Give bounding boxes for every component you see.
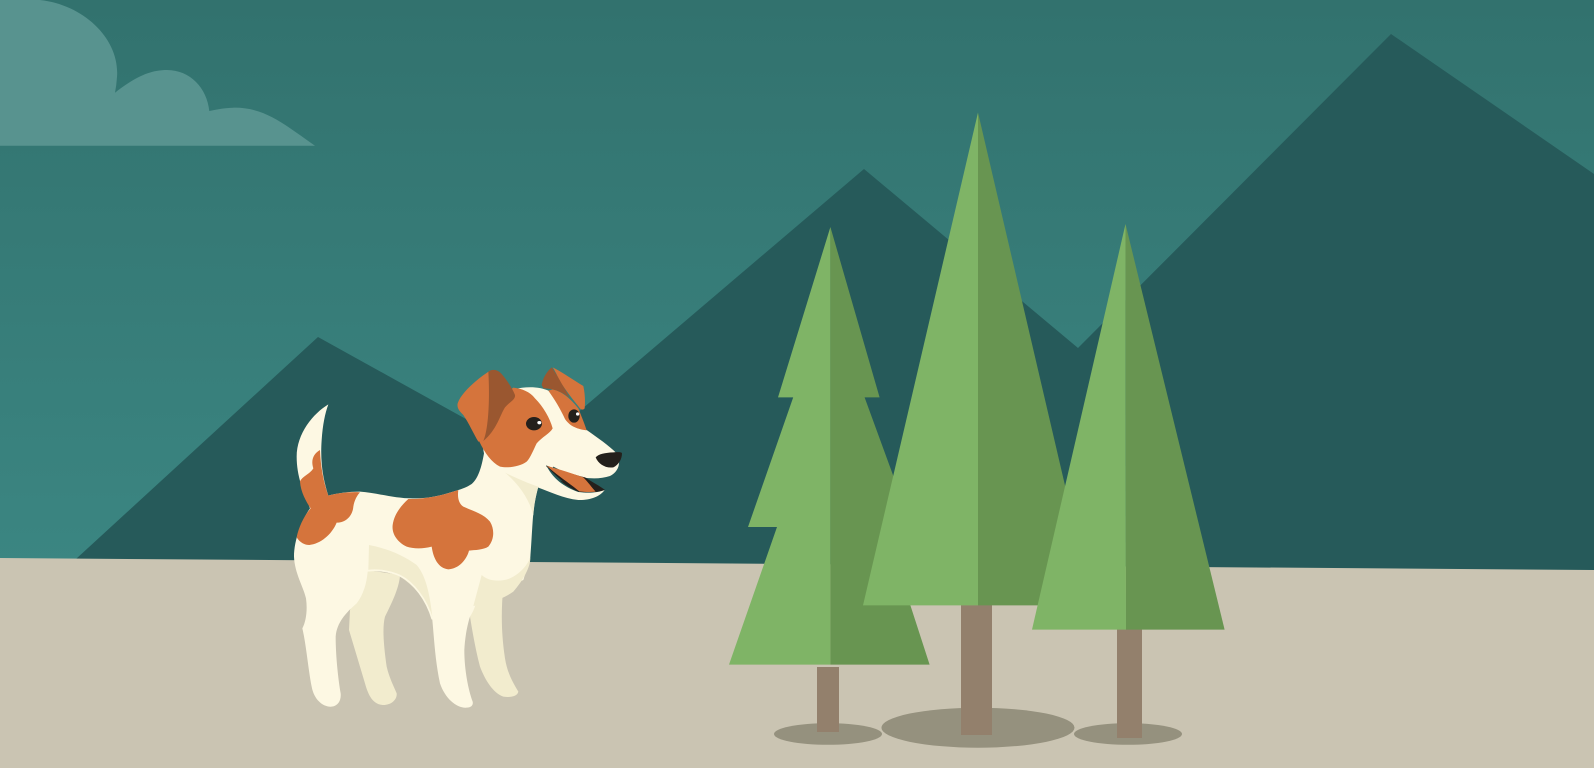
right eyeball <box>568 409 580 423</box>
tree: centre <box>863 112 1093 748</box>
nose <box>596 452 622 468</box>
right tree foliage dark side <box>1126 224 1225 630</box>
far rear leg <box>349 570 400 705</box>
body and near legs <box>294 404 547 708</box>
right ear <box>553 367 585 410</box>
right eye highlight <box>576 412 579 416</box>
right ear fold <box>542 367 570 398</box>
mouth interior <box>546 465 605 492</box>
mountains <box>76 34 1594 572</box>
tree: left <box>729 227 930 745</box>
centre tree foliage light side <box>863 112 978 605</box>
chest shading <box>473 557 530 606</box>
cloud <box>0 0 315 146</box>
tongue <box>547 466 596 492</box>
left eye highlight <box>537 421 541 424</box>
ground <box>0 558 1594 768</box>
centre tree trunk <box>961 604 992 735</box>
head <box>483 387 619 483</box>
back patch <box>393 490 493 569</box>
left tree foliage light side <box>729 227 830 665</box>
left tree shadow <box>774 723 882 745</box>
centre tree shadow <box>882 708 1074 748</box>
far front leg <box>470 587 518 697</box>
right tree foliage light side <box>1032 224 1126 630</box>
left eyeball <box>526 417 542 430</box>
left ear <box>457 371 497 442</box>
right tree shadow <box>1074 723 1182 745</box>
right tree trunk <box>1117 628 1142 738</box>
right eye patch <box>548 389 587 430</box>
tree: right <box>1032 224 1225 745</box>
hip crease line <box>368 570 432 619</box>
sky background <box>0 0 1594 570</box>
head patch around eye <box>479 388 553 467</box>
inner mouth teal sliver <box>546 465 563 482</box>
lower jaw <box>538 463 605 500</box>
dog <box>294 367 622 708</box>
left tree foliage dark side <box>830 227 930 665</box>
left tree trunk <box>817 667 839 732</box>
left eye <box>526 417 542 430</box>
hip shading <box>368 545 432 617</box>
rump and tail patch <box>297 450 360 545</box>
left ear fold <box>483 370 515 441</box>
centre tree foliage dark side <box>978 112 1093 605</box>
neck shading <box>505 473 538 516</box>
right eye <box>568 409 580 423</box>
